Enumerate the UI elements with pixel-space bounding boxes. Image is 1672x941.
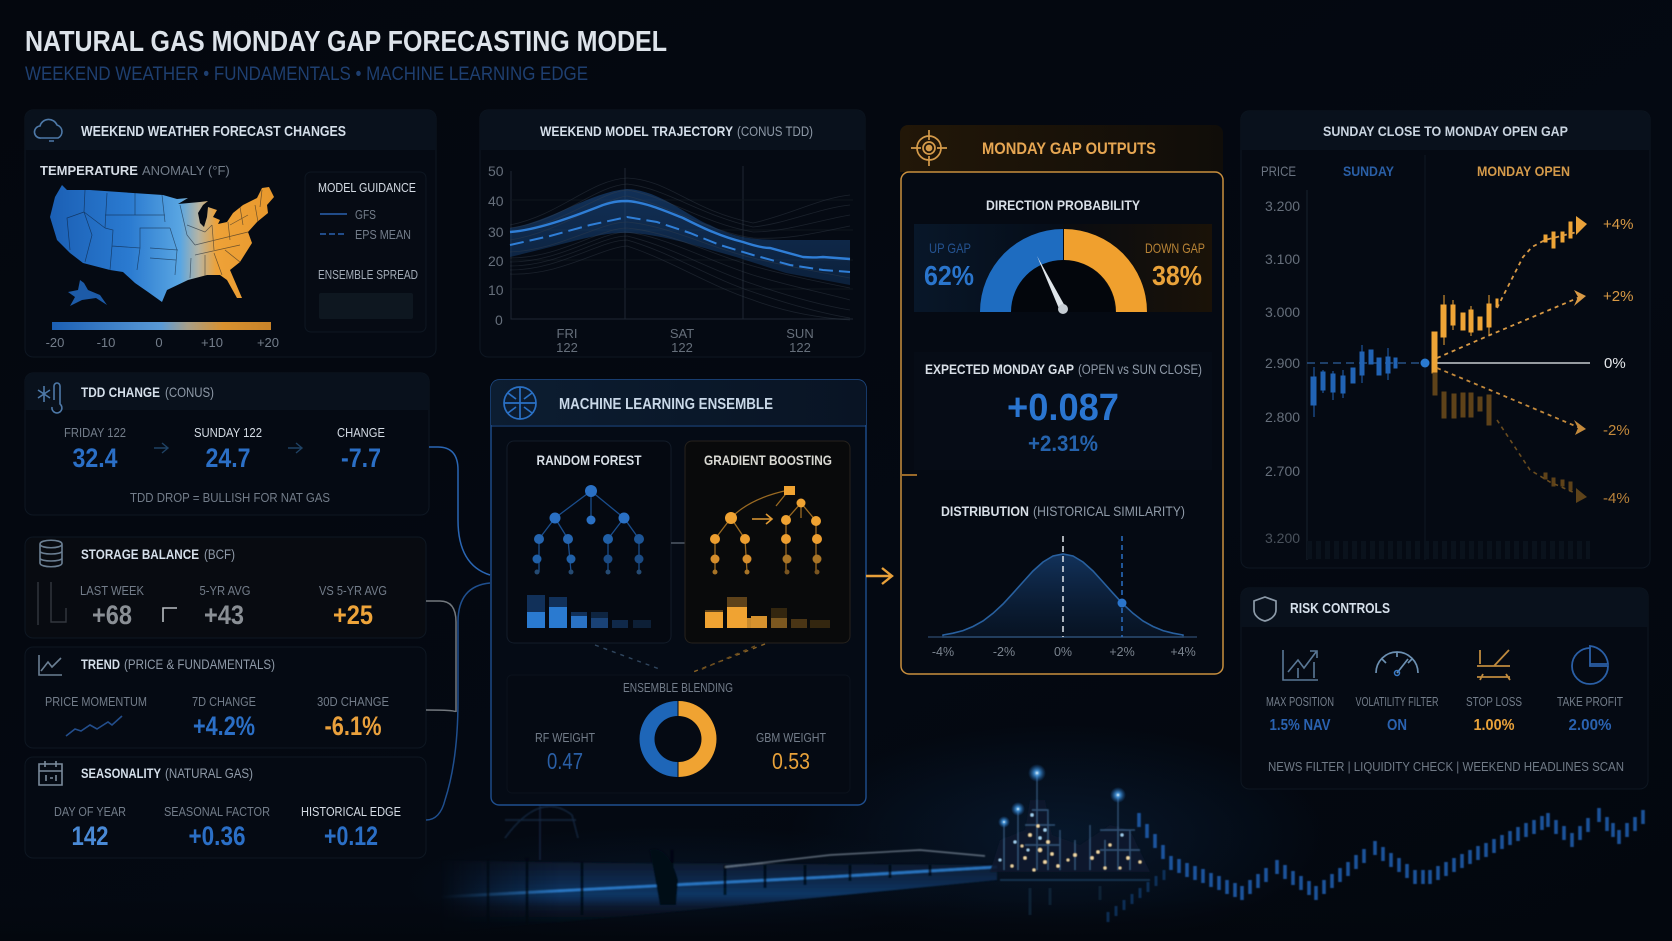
gap percentage labels: +4% [1603, 216, 1633, 233]
Monday candles up [1432, 222, 1572, 373]
metric: price momentum: PRICE MOMENTUM [45, 694, 147, 709]
icon: brain network [504, 387, 536, 419]
up gap value: 62% [924, 260, 974, 291]
x axis labels: 122 [671, 340, 693, 355]
y axis labels: 20 [488, 253, 504, 269]
control: take profit: 2.00% [1568, 717, 1612, 734]
control: stop loss [1466, 650, 1522, 734]
metric: Sunday [194, 425, 262, 473]
panel: Monday gap outputs [900, 125, 1223, 674]
panel: seasonality [25, 757, 426, 858]
volume strip [1307, 541, 1590, 559]
tree diagram: blue [532, 485, 644, 574]
metric: 30 day change: 30D CHANGE [317, 694, 389, 709]
metric: 30 day change [317, 694, 389, 741]
section: distribution [928, 503, 1197, 659]
GBM weight: GBM WEIGHT [756, 730, 826, 745]
y axis labels: 0 [495, 312, 503, 328]
distribution axis labels: +2% [1109, 645, 1135, 659]
distribution axis labels: 0% [1054, 645, 1072, 659]
gap percentage labels [1603, 216, 1633, 507]
metric: change [337, 425, 385, 473]
section: distribution: DISTRIBUTION(HISTORICAL SIMILARITY) [941, 503, 1185, 519]
metric: historical edge: +0.12 [324, 821, 378, 851]
sub-panel: random forest [507, 441, 671, 643]
control: max position: 1.5% NAV [1270, 717, 1331, 734]
arrowheads [1574, 216, 1587, 503]
connector lines to ensemble [426, 447, 490, 820]
distribution axis labels: -2% [993, 645, 1015, 659]
heading: MACHINE LEARNING ENSEMBLE [559, 396, 773, 413]
legend box: ENSEMBLE SPREAD [318, 267, 418, 282]
footnote: TDD DROP = BULLISH FOR NAT GAS [130, 490, 330, 505]
scene: pipeline and refinery at night [0, 725, 1672, 941]
metric: versus 5 year average: VS 5-YR AVG [319, 583, 387, 598]
metric: seasonal factor: SEASONAL FACTOR [164, 804, 270, 819]
heading: weather: WEEKEND WEATHER FORECAST CHANGES [81, 123, 346, 140]
up gap value: UP GAP [929, 240, 971, 256]
title: NATURAL GAS MONDAY GAP FORECASTING MODEL [25, 26, 667, 58]
Sunday candles [1311, 345, 1397, 417]
price axis labels: 3.000 [1265, 304, 1300, 320]
y axis labels: 40 [488, 193, 504, 209]
price axis labels: 3.100 [1265, 251, 1300, 267]
metric: last week [80, 583, 144, 630]
heading: TDD CHANGE(CONUS) [81, 384, 214, 400]
panel: machine learning ensemble [491, 380, 866, 805]
section: direction probability: DIRECTION PROBABILITY [986, 197, 1141, 213]
icon: snow and thermometer [38, 383, 62, 413]
control: max position: MAX POSITION [1266, 694, 1334, 709]
metric: Friday: FRIDAY 122 [64, 425, 126, 440]
arrow: ensemble to outputs [866, 568, 892, 584]
small gauge tube [38, 582, 66, 625]
sub-panel: ensemble blending: ENSEMBLE BLENDING [623, 680, 733, 695]
x axis labels: SUN [786, 326, 814, 341]
gauge chart [980, 229, 1147, 314]
metric: day of year: DAY OF YEAR [54, 804, 126, 819]
distribution axis labels: -4% [932, 645, 954, 659]
orange tick [901, 474, 917, 476]
connector between models [671, 542, 685, 544]
metric: Friday: 32.4 [72, 443, 118, 473]
section: expected Monday gap: +2.31% [1028, 431, 1098, 456]
importance bars: blue [527, 595, 651, 628]
heading: WEEKEND MODEL TRAJECTORY(CONUS TDD) [540, 123, 813, 139]
control: stop loss: 1.00% [1474, 717, 1514, 734]
importance bars: orange [705, 597, 830, 628]
price axis labels: 2.800 [1265, 409, 1300, 425]
forecast paths [1437, 232, 1580, 493]
metric: versus 5 year average: +25 [333, 600, 373, 630]
x axis labels: 122 [789, 340, 811, 355]
icon: cloud [34, 119, 62, 141]
colour scale labels: +10 [201, 335, 223, 350]
metric: 7 day change: 7D CHANGE [192, 694, 256, 709]
x axis labels: SAT [670, 326, 694, 341]
colour scale labels [46, 335, 279, 350]
down gap value: DOWN GAP [1145, 240, 1205, 256]
flag marker [163, 608, 177, 622]
control: volatility filter [1356, 652, 1438, 734]
control: take profit [1557, 646, 1623, 734]
metric: 30 day change: -6.1% [324, 711, 382, 741]
icon: target [911, 130, 947, 166]
metric: change: CHANGE [337, 425, 385, 440]
arrow [154, 443, 168, 453]
price axis labels: 3.200 [1265, 198, 1300, 214]
lower fade of pipeline [0, 900, 1672, 941]
sub-panel: gradient boosting [685, 441, 850, 643]
metric: price momentum [45, 694, 147, 736]
colour scale labels: +20 [257, 335, 279, 350]
price axis labels: 2.700 [1265, 463, 1300, 479]
heading: SUNDAY CLOSE TO MONDAY OPEN GAP [1323, 123, 1568, 139]
RF weight: 0.47 [547, 748, 583, 774]
colour scale labels: -10 [97, 335, 115, 350]
column labels: SUNDAY [1343, 163, 1395, 179]
GBM weight [756, 730, 826, 774]
RF weight: RF WEIGHT [535, 730, 595, 745]
metric: versus 5 year average [319, 583, 387, 630]
donut chart [640, 701, 716, 777]
up gap value [924, 240, 974, 291]
colour scale bar [52, 322, 271, 330]
legend box: MODEL GUIDANCE [318, 180, 416, 195]
heading: TREND(PRICE & FUNDAMENTALS) [81, 656, 275, 672]
section: direction probability [914, 197, 1212, 314]
arrow [288, 443, 302, 453]
scene: glowing price wave [1108, 808, 1643, 922]
control: take profit: TAKE PROFIT [1557, 694, 1623, 709]
icon: database [40, 540, 62, 567]
metric: seasonal factor [164, 804, 270, 851]
metric: Sunday: 24.7 [206, 443, 250, 473]
metric: 7 day change: +4.2% [193, 711, 255, 741]
metric: 5 year average: 5-YR AVG [200, 583, 250, 598]
gap percentage labels: -2% [1603, 422, 1630, 439]
column labels [1261, 163, 1570, 179]
section: expected Monday gap: EXPECTED MONDAY GAP(OPEN vs SUN CLOSE) [925, 361, 1202, 377]
metric: 5 year average: +43 [204, 600, 244, 630]
gap percentage labels: 0% [1604, 355, 1626, 372]
metric: 5 year average [200, 583, 250, 630]
colour scale labels: 0 [155, 335, 163, 350]
tree diagram: orange [710, 486, 822, 574]
column labels: PRICE [1261, 163, 1296, 179]
section: expected Monday gap [914, 352, 1212, 470]
price axis labels: 2.900 [1265, 355, 1300, 371]
icon: line chart [39, 655, 62, 675]
legend box [305, 172, 426, 332]
price axis labels [1265, 198, 1300, 546]
distribution axis labels: +4% [1170, 645, 1196, 659]
y axis labels: 50 [488, 163, 504, 179]
map heading: TEMPERATURE ANOMALY (°F) [40, 163, 230, 178]
Monday candles down [1433, 373, 1572, 490]
panel: storage balance [25, 537, 426, 638]
sub-panel: ensemble blending [507, 675, 850, 793]
metric: last week: LAST WEEK [80, 583, 144, 598]
metric: Friday [64, 425, 126, 473]
GBM weight: 0.53 [772, 748, 810, 774]
down gap value [1145, 240, 1205, 291]
metric: seasonal factor: +0.36 [188, 821, 246, 851]
heading: MONDAY GAP OUTPUTS [982, 139, 1156, 158]
distribution axis labels [932, 645, 1196, 659]
chart: TDD ensemble [510, 166, 853, 320]
candlestick chart [1307, 155, 1590, 560]
colour scale labels: -20 [46, 335, 64, 350]
subtitle: WEEKEND WEATHER • FUNDAMENTALS • MACHINE LEARNING EDGE [25, 64, 588, 85]
down gap value: 38% [1152, 260, 1202, 291]
sub-panel: random forest: RANDOM FOREST [536, 452, 642, 468]
gap percentage labels: +2% [1603, 288, 1633, 305]
panel: Sunday close to Monday open gap [1241, 111, 1650, 568]
control: stop loss: STOP LOSS [1466, 694, 1522, 709]
legend box: GFS [355, 207, 376, 222]
heading: RISK CONTROLS [1290, 600, 1390, 617]
x axis labels [556, 326, 814, 355]
control: volatility filter: VOLATILITY FILTER [1356, 694, 1438, 709]
legend box: EPS MEAN [355, 227, 411, 242]
metric: day of year [54, 804, 126, 851]
metric: historical edge: HISTORICAL EDGE [301, 804, 401, 819]
y axis labels: 30 [488, 224, 504, 240]
RF weight [535, 730, 595, 774]
x axis labels: 122 [556, 340, 578, 355]
panel: weekend weather forecast changes [25, 110, 436, 357]
control: volatility filter: ON [1387, 717, 1407, 734]
panel: trend [25, 647, 426, 748]
section: expected Monday gap: +0.087 [1007, 387, 1119, 429]
price axis labels: 3.200 [1265, 530, 1300, 546]
map: US temperature anomaly [50, 185, 274, 306]
column labels: MONDAY OPEN [1477, 163, 1570, 179]
gap percentage labels: -4% [1603, 490, 1630, 507]
icon: calendar [39, 761, 62, 785]
bell curve chart [928, 536, 1197, 637]
y axis labels: 10 [488, 282, 504, 298]
metric: 7 day change [192, 694, 256, 741]
panel: TDD change [25, 373, 429, 515]
heading: SEASONALITY(NATURAL GAS) [81, 765, 253, 781]
heading: STORAGE BALANCE(BCF) [81, 546, 235, 562]
footer filters: NEWS FILTER | LIQUIDITY CHECK | WEEKEND HEADLINES SCAN [1268, 759, 1624, 774]
sub-panel: gradient boosting: GRADIENT BOOSTING [704, 452, 832, 468]
control: max position [1266, 650, 1334, 734]
panel: weekend model trajectory [480, 110, 865, 357]
icon: shield [1254, 597, 1276, 621]
panel: risk controls [1241, 588, 1648, 789]
metric: change: -7.7 [341, 443, 381, 473]
dotted blend lines [595, 644, 765, 672]
y axis labels [488, 163, 504, 328]
metric: day of year: 142 [72, 821, 108, 851]
metric: last week: +68 [92, 600, 132, 630]
x axis labels: FRI [557, 326, 577, 341]
metric: historical edge [301, 804, 401, 851]
metric: Sunday: SUNDAY 122 [194, 425, 262, 440]
